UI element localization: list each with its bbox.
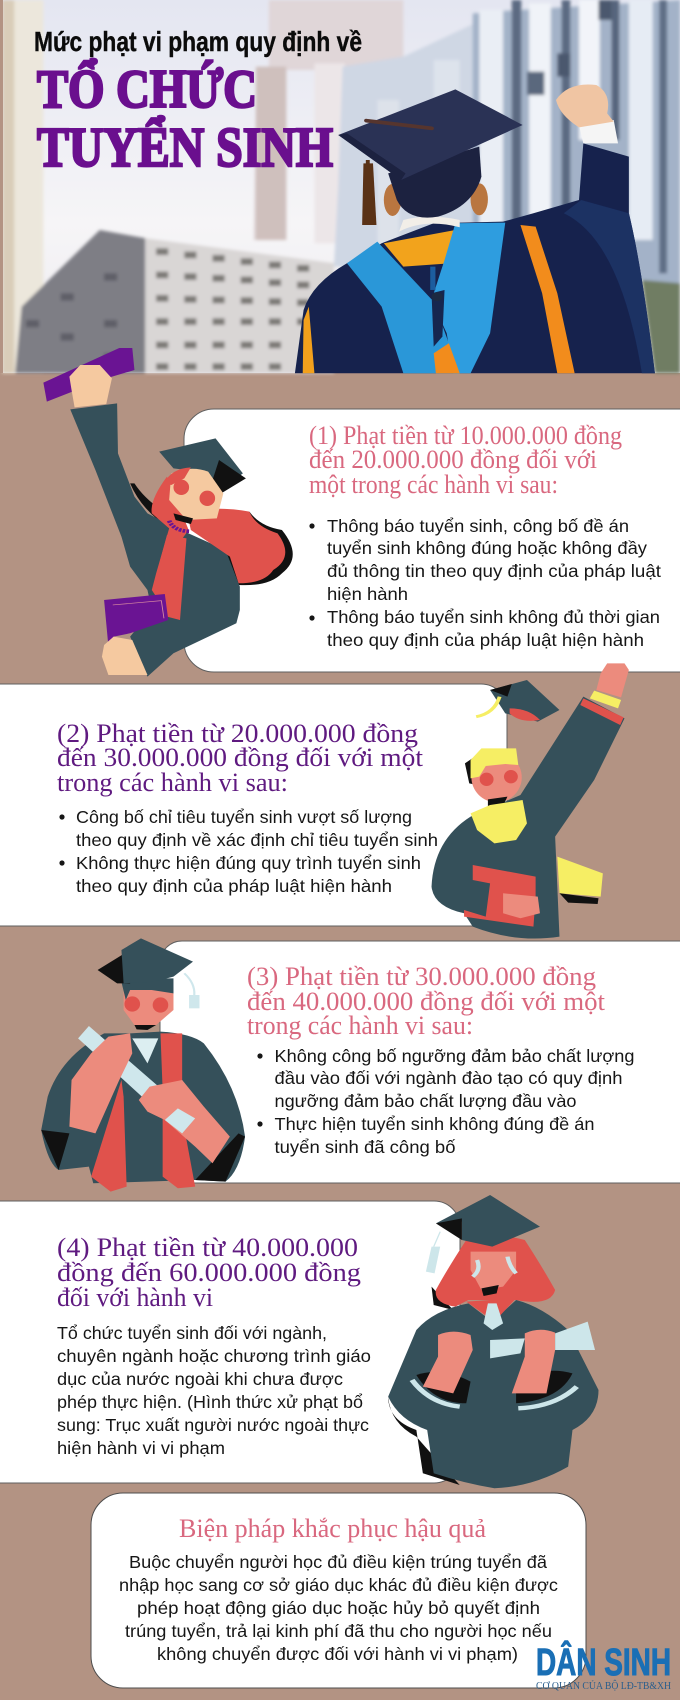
- panel 2 bullet list: [59, 807, 438, 896]
- title line 3: TUYỂN SINH: [37, 115, 333, 179]
- panel 5 body text: phép hoạt động giáo dục hoặc hủy bỏ quyết định: [137, 1598, 540, 1618]
- panel 3 bullet list: Không công bố ngưỡng đảm bảo chất lượng: [274, 1046, 634, 1066]
- gown: [295, 143, 655, 373]
- panel 5 body text: không chuyển được đối với hành vi vi phạm): [157, 1644, 518, 1664]
- panel 3 heading: trong các hành vi sau:: [247, 1011, 473, 1040]
- panel 3 heading: đến 40.000.000 đồng đối với một: [247, 987, 606, 1016]
- panel 4 card: [0, 1201, 460, 1483]
- panel 5 body text: [119, 1552, 558, 1664]
- panel 3 bullet list: [257, 1046, 634, 1157]
- panel 1 bullet list: đủ thông tin theo quy định của pháp luật: [327, 561, 661, 581]
- panel 2 bullet list: Không thực hiện đúng quy trình tuyển sinh: [76, 853, 421, 873]
- panel 3 bullet list: ngưỡng đảm bảo chất lượng đầu vào: [274, 1091, 576, 1111]
- panel 1 bullet list: hiện hành: [327, 584, 408, 604]
- panel 1 bullet list: Thông báo tuyển sinh, công bố đề án: [327, 516, 629, 536]
- panel 1 heading: [309, 421, 622, 499]
- panel 1 heading: một trong các hành vi sau:: [309, 470, 558, 499]
- panel 2 heading: (2) Phạt tiền từ 20.000.000 đồng: [57, 719, 418, 748]
- head: [384, 184, 401, 216]
- title line 1: Mức phạt vi phạm quy định về: [34, 26, 362, 57]
- panel 3 heading: [247, 962, 606, 1040]
- panel 1 heading: đến 20.000.000 đồng đối với: [309, 445, 597, 474]
- panel 1 bullet list: [309, 516, 661, 650]
- panel 3 heading: (3) Phạt tiền từ 30.000.000 đồng: [247, 962, 596, 991]
- panel 3 card: [160, 941, 680, 1183]
- panel 2 heading: [57, 719, 424, 797]
- panel 4 heading: (4) Phạt tiền từ 40.000.000: [57, 1233, 358, 1262]
- illustration: blond graduate raising hand: [432, 663, 629, 939]
- cap: [338, 89, 523, 180]
- panel 4 body text: hiện hành vi vi phạm: [57, 1438, 225, 1458]
- panel 3 bullet list: tuyển sinh đã công bố: [274, 1137, 456, 1157]
- panel 1 bullet list: tuyển sinh không đúng hoặc không đầy: [327, 538, 647, 558]
- panel 4 heading: [57, 1233, 361, 1312]
- title line 2: TỔ CHỨC: [37, 58, 257, 119]
- panel 3 bullet list: đầu vào đối với ngành đào tạo có quy định: [274, 1068, 622, 1088]
- panel 3 bullet list: Thực hiện tuyển sinh không đúng đề án: [274, 1114, 594, 1134]
- panel 4 body text: phép thực hiện. (Hình thức xử phạt bổ: [57, 1392, 363, 1412]
- panel 4 body text: dục của nước ngoài khi chưa được: [57, 1369, 343, 1389]
- panel 2 bullet list: Công bố chỉ tiêu tuyển sinh vượt số lượng: [76, 807, 412, 827]
- main title: [34, 26, 362, 179]
- logo: Dân Sinh: [536, 1640, 671, 1692]
- panel 2 heading: trong các hành vi sau:: [57, 768, 288, 797]
- panel 2 heading: đến 30.000.000 đồng đối với một: [57, 743, 424, 772]
- panel 4 body text: Tổ chức tuyển sinh đối với ngành,: [57, 1323, 327, 1343]
- panel 2 bullet list: theo quy định về xác định chỉ tiêu tuyển sinh: [76, 830, 438, 850]
- panel 1 bullet list: Thông báo tuyển sinh không đủ thời gian: [327, 607, 660, 627]
- hero photo: graduate and city buildings: [0, 0, 680, 373]
- panel 5 body text: nhập học sang cơ sở giáo dục khác đủ điều kiện được: [119, 1575, 558, 1595]
- illustration: graduate holding diploma: [41, 938, 245, 1192]
- panel 1 card: [184, 409, 680, 672]
- panel 2 card: [0, 684, 507, 926]
- illustration: graduate girl holding scroll and book: [43, 348, 293, 677]
- panel 5 card: [91, 1493, 586, 1688]
- panel 4 body text: chuyên ngành hoặc chương trình giáo: [57, 1346, 371, 1366]
- panel 4 body text: sung: Trục xuất người nước ngoài thực: [57, 1415, 369, 1435]
- panel 4 heading: đối với hành vi: [57, 1283, 213, 1312]
- panel 4 heading: đồng đến 60.000.000 đồng: [57, 1258, 361, 1287]
- raised arm: [579, 120, 618, 143]
- panel 1 bullet list: theo quy định của pháp luật hiện hành: [327, 630, 644, 650]
- panel 1 heading: (1) Phạt tiền từ 10.000.000 đồng: [309, 421, 622, 450]
- logo tagline: CƠ QUAN CỦA BỘ LĐ-TB&XH: [536, 1680, 671, 1692]
- panel 2 bullet list: theo quy định của pháp luật hiện hành: [76, 876, 392, 896]
- panel 5 body text: trúng tuyển, trả lại kinh phí đã thu cho người học nếu: [125, 1621, 552, 1641]
- illustration: crying graduate: [388, 1195, 599, 1488]
- panel 4 body text: [57, 1323, 371, 1458]
- panel 5 body text: Buộc chuyển người học đủ điều kiện trúng tuyển đã: [129, 1552, 547, 1572]
- panel 5 heading: Biện pháp khắc phục hậu quả: [179, 1514, 486, 1543]
